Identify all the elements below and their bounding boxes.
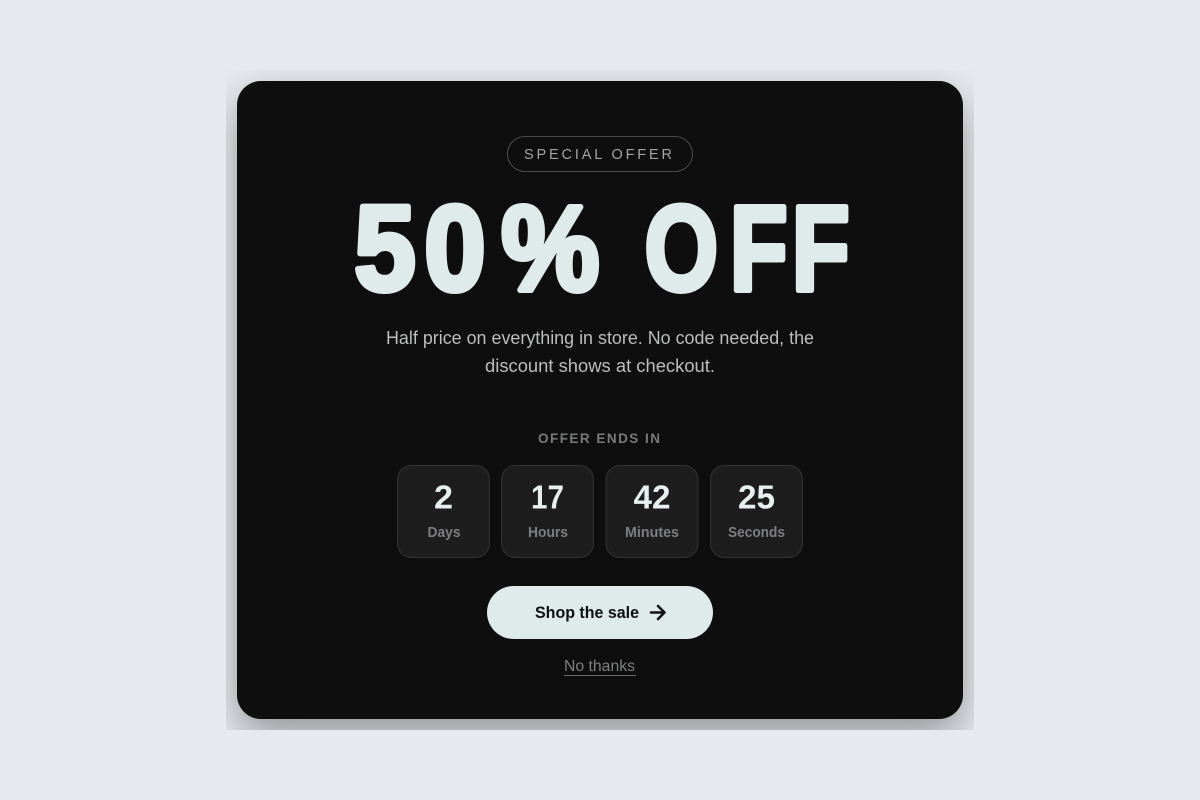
description text: discount shows at checkout. xyxy=(485,356,715,376)
countdown: hours: 17 xyxy=(531,478,564,516)
countdown: hours: Hours xyxy=(528,525,568,541)
countdown: seconds xyxy=(710,466,802,558)
button: shop the sale xyxy=(487,586,713,639)
countdown: seconds: 25 xyxy=(738,478,775,516)
link: no thanks: No thanks xyxy=(564,658,635,675)
countdown: minutes: Minutes xyxy=(625,525,679,541)
description text xyxy=(386,328,814,376)
countdown: minutes: 42 xyxy=(634,478,670,516)
countdown label: OFFER ENDS IN xyxy=(538,431,660,446)
card with shadow xyxy=(226,72,974,730)
headline: 50% OFF: 50% xyxy=(354,180,599,316)
countdown: days xyxy=(398,466,490,558)
headline: 50% OFF: OFF xyxy=(645,181,850,316)
headline: 50% OFF xyxy=(354,180,850,316)
countdown: minutes xyxy=(606,466,698,558)
countdown: hours xyxy=(502,466,594,558)
icon: arrow xyxy=(651,606,664,619)
countdown: days: 2 xyxy=(434,478,453,516)
description text: Half price on everything in store. No code needed, the xyxy=(386,328,814,348)
countdown: seconds: Seconds xyxy=(728,525,785,541)
button: shop the sale: Shop the sale xyxy=(535,603,639,622)
badge: special offer: SPECIAL OFFER xyxy=(524,147,672,163)
badge: special offer xyxy=(508,136,692,172)
countdown: days: Days xyxy=(428,525,460,541)
